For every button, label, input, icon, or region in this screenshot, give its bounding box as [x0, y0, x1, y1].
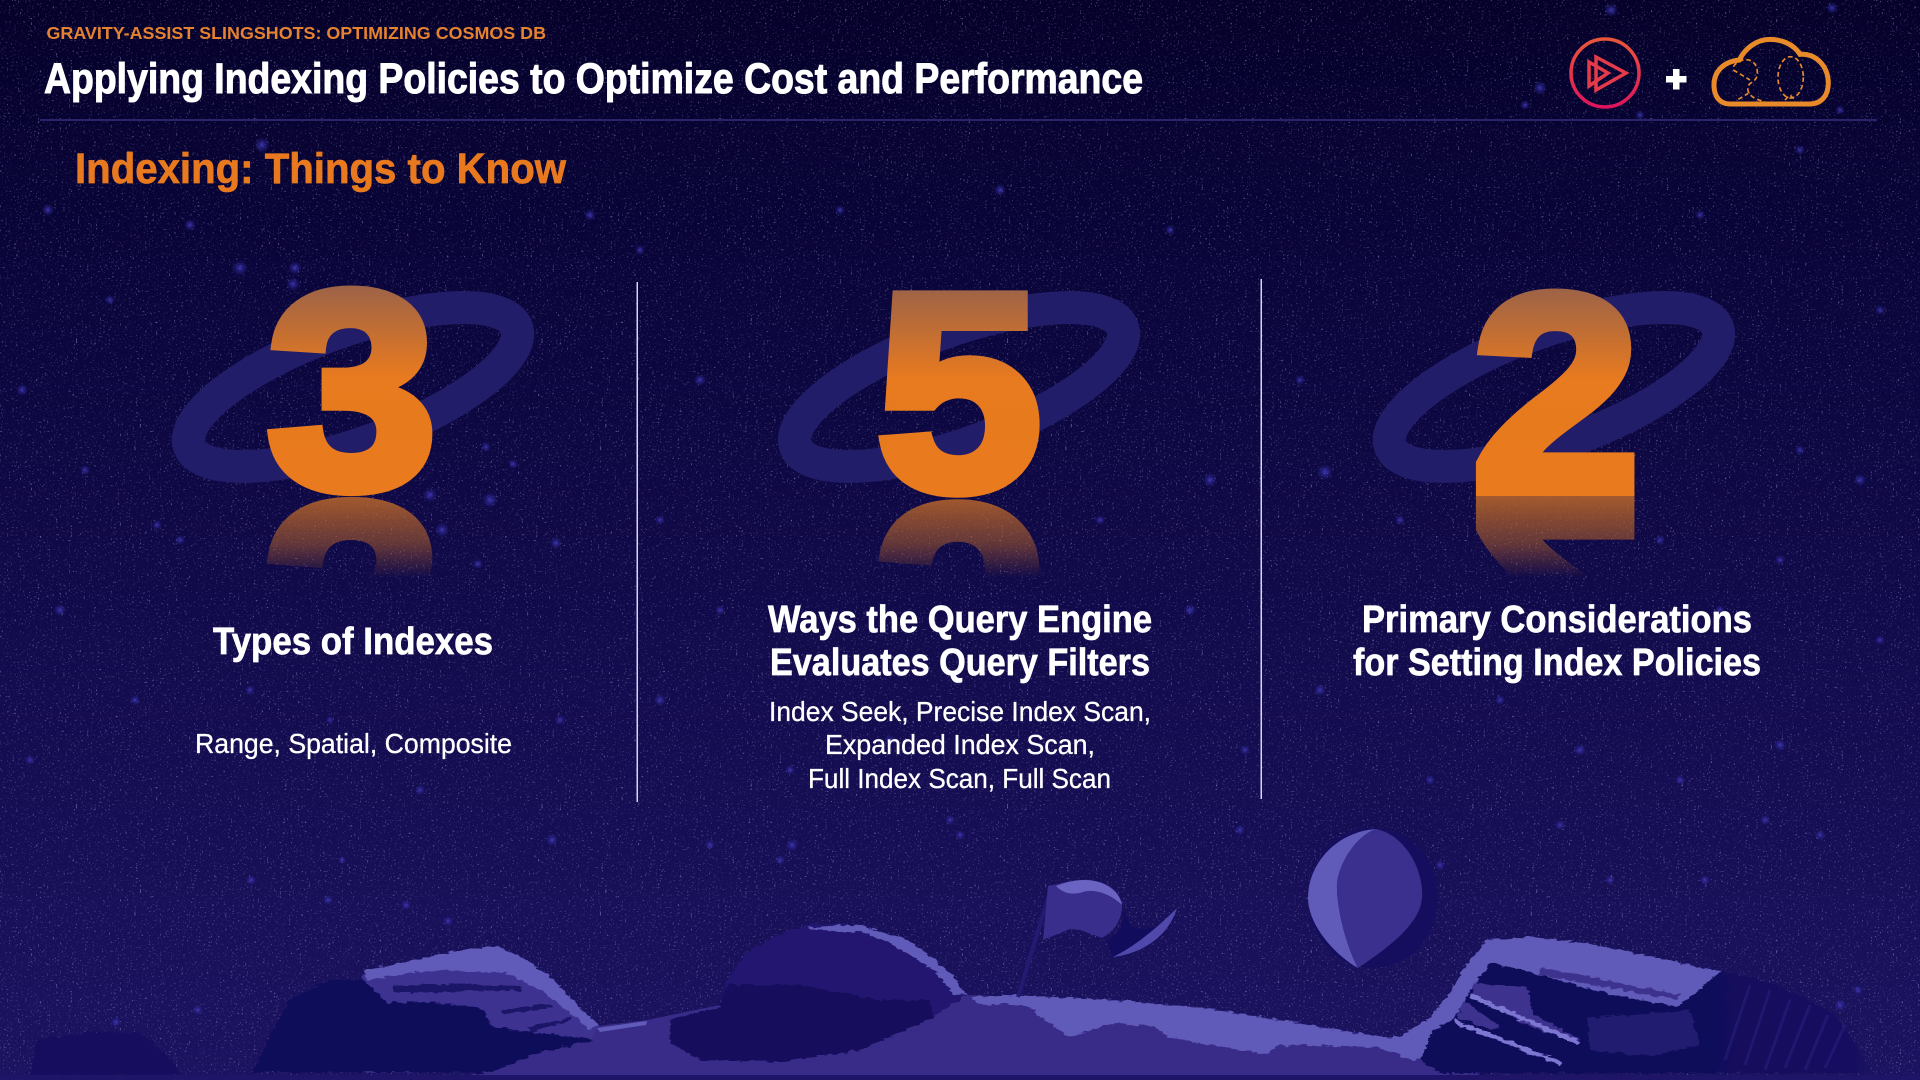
heading: ways the query engine: [768, 599, 1152, 684]
heading: types of indexes: Types of Indexes: [213, 621, 493, 663]
column 2: query engine: [768, 237, 1152, 794]
icon: plus sign: [1666, 69, 1686, 90]
right rock: [1400, 937, 1870, 1073]
heading: ways the query engine: Ways the Query Engine: [768, 599, 1152, 641]
light sliver beside left hill: [597, 1021, 647, 1032]
column divider 1: [636, 282, 638, 802]
eyebrow label: GRAVITY-ASSIST SLINGSHOTS: OPTIMIZING COSMOS DB: [46, 23, 546, 43]
rock brush streaks: [1725, 985, 1845, 1070]
moon surface ground: [470, 995, 1480, 1075]
number reflection: 3: [267, 446, 437, 758]
big number 5: 5: [876, 237, 1042, 549]
icon: cloud with dashed balloons: [1714, 39, 1828, 104]
heading: primary considerations: for Setting Index Policies: [1353, 642, 1761, 684]
body: index types: Range, Spatial, Composite: [195, 728, 512, 759]
column 1: types of indexes: [170, 235, 536, 759]
icon: Pluralsight play logo: [1571, 39, 1639, 107]
heading: primary considerations: [1353, 599, 1761, 684]
body: evaluation methods: Expanded Index Scan,: [825, 729, 1095, 760]
section heading: Indexing: Things to Know: [75, 145, 567, 193]
low mound far left: [30, 1032, 182, 1075]
planet ring: [776, 275, 1142, 499]
left hill: [253, 947, 598, 1073]
header divider: [40, 119, 1877, 121]
column divider 2: [1260, 279, 1262, 799]
title: Applying Indexing Policies to Optimize Cost and Performance: [44, 55, 1143, 103]
moon: [1308, 828, 1438, 968]
ground light rim: [970, 995, 1416, 1060]
body: evaluation methods: Index Seek, Precise Index Scan,: [769, 696, 1151, 727]
heading: ways the query engine: Evaluates Query Filters: [770, 642, 1150, 684]
planet ring: [170, 275, 536, 499]
illustration: lunar landscape: [0, 828, 1920, 1080]
big number 3: 3: [267, 235, 437, 547]
big number 2: 2: [1472, 236, 1640, 550]
body: evaluation methods: Full Index Scan, Full Scan: [808, 763, 1111, 794]
heading: primary considerations: Primary Considerations: [1362, 599, 1752, 641]
number reflection: 2: [1472, 442, 1640, 756]
centre dome hill: [670, 923, 967, 1062]
bottom band: [0, 1075, 1920, 1080]
body: evaluation methods: [769, 696, 1151, 794]
number reflection: 5: [876, 448, 1042, 760]
flag: [1018, 880, 1177, 997]
column 3: index policy considerations: [1353, 288, 1760, 684]
planet ring: [1371, 275, 1737, 499]
